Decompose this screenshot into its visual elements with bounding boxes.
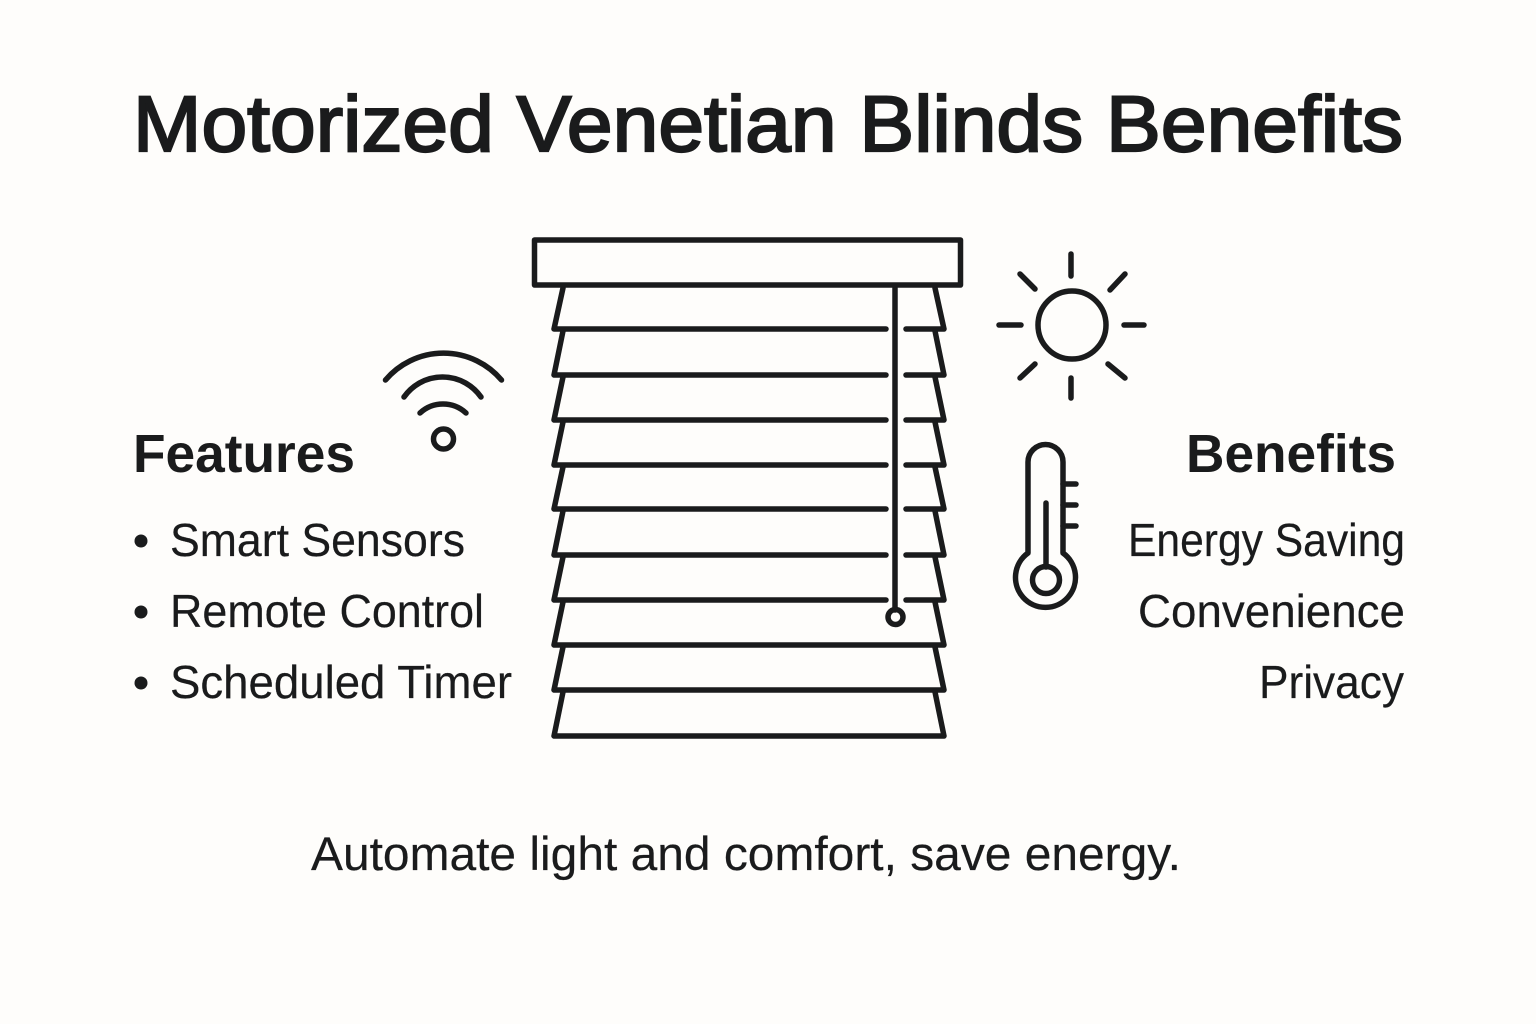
benefit: energy saving: Energy Saving <box>1128 514 1405 566</box>
feature: scheduled timer: Scheduled Timer <box>170 656 512 708</box>
cord end ring <box>888 610 903 624</box>
headrail <box>534 240 960 285</box>
feature: smart sensors: Smart Sensors <box>170 514 465 566</box>
slat 1 <box>554 288 944 329</box>
benefit: privacy: Privacy <box>1259 656 1404 708</box>
slat 9 <box>554 647 944 690</box>
slat 5 <box>554 467 944 509</box>
icon: thermometer <box>1016 444 1076 607</box>
pull cord <box>892 288 898 610</box>
illustration: venetian blind <box>534 240 960 736</box>
slat 3 <box>554 377 944 420</box>
benefits list <box>1128 514 1405 708</box>
tagline: Automate light and comfort, save energy. <box>311 827 1181 880</box>
slat 7 <box>554 557 944 600</box>
benefit: convenience: Convenience <box>1138 585 1405 637</box>
slat 8 <box>554 602 944 645</box>
slat 10 <box>554 692 944 736</box>
slat 2 <box>554 331 944 375</box>
features heading: Features <box>133 424 355 484</box>
bullet: remote control <box>134 606 148 618</box>
slat 4 <box>554 422 944 465</box>
icon: wifi <box>386 353 502 449</box>
bullet: smart sensors <box>134 534 148 548</box>
feature: remote control: Remote Control <box>170 585 484 637</box>
slat 6 <box>554 511 944 555</box>
bullet: scheduled timer <box>134 676 148 690</box>
features list <box>134 514 512 708</box>
title: Motorized Venetian Blinds Benefits <box>133 79 1403 168</box>
icon: sun <box>999 254 1144 398</box>
benefits heading: Benefits <box>1186 424 1396 484</box>
